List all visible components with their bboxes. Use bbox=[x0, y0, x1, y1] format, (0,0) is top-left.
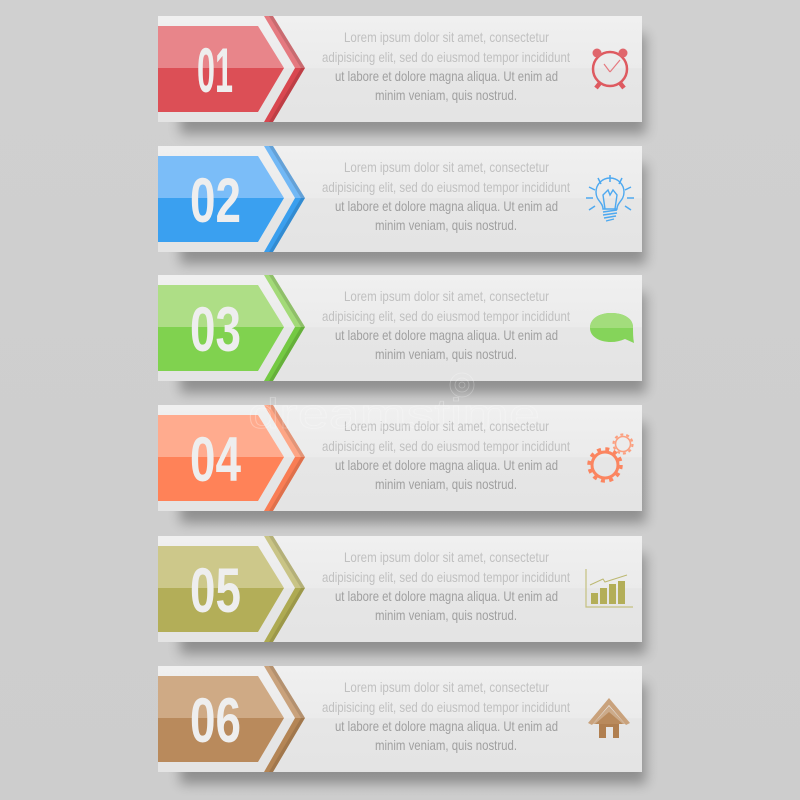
step number: 04 bbox=[190, 425, 241, 495]
panel shadow bbox=[180, 34, 646, 134]
arrow badge bbox=[158, 546, 284, 632]
text block: adipisicing elit, sed do eiusmod tempor incididunt bbox=[322, 49, 570, 65]
text block bbox=[322, 29, 570, 103]
panel 5: olive step bbox=[158, 536, 646, 654]
step number: 02 bbox=[190, 166, 241, 236]
step number: 03 bbox=[190, 295, 241, 365]
arrow badge bbox=[158, 26, 284, 112]
watermark: dreamstime bbox=[248, 390, 540, 437]
text block: minim veniam, quis nostrud. bbox=[375, 87, 517, 103]
panel shadow bbox=[180, 554, 646, 654]
text block: Lorem ipsum dolor sit amet, consectetur bbox=[344, 679, 549, 695]
text block bbox=[322, 288, 570, 362]
watermark bbox=[248, 373, 540, 437]
text block: adipisicing elit, sed do eiusmod tempor incididunt bbox=[322, 569, 570, 585]
card bbox=[158, 275, 642, 381]
text block: Lorem ipsum dolor sit amet, consectetur bbox=[344, 29, 549, 45]
chevron bbox=[264, 666, 305, 772]
text block: Lorem ipsum dolor sit amet, consectetur bbox=[344, 549, 549, 565]
step number: 05 bbox=[190, 556, 241, 626]
text block: adipisicing elit, sed do eiusmod tempor incididunt bbox=[322, 308, 570, 324]
panel shadow bbox=[180, 164, 646, 264]
card bbox=[158, 536, 642, 642]
text block: ut labore et dolore magna aliqua. Ut enim ad bbox=[335, 457, 558, 473]
text block bbox=[322, 549, 570, 623]
text block: minim veniam, quis nostrud. bbox=[375, 607, 517, 623]
icon: house bbox=[588, 698, 630, 738]
icon: speech bubble bbox=[590, 313, 634, 343]
card bbox=[158, 666, 642, 772]
panel 6: tan step bbox=[158, 666, 646, 784]
panel shadow bbox=[180, 423, 646, 523]
text block: ut labore et dolore magna aliqua. Ut enim ad bbox=[335, 198, 558, 214]
text block: minim veniam, quis nostrud. bbox=[375, 476, 517, 492]
text block: Lorem ipsum dolor sit amet, consectetur bbox=[344, 159, 549, 175]
text block: ut labore et dolore magna aliqua. Ut enim ad bbox=[335, 68, 558, 84]
panel 3: green step bbox=[158, 275, 646, 393]
icon: light bulb bbox=[586, 175, 634, 221]
panel 1: red step bbox=[158, 16, 646, 134]
text block: adipisicing elit, sed do eiusmod tempor incididunt bbox=[322, 699, 570, 715]
card bbox=[158, 405, 642, 511]
panel 2: blue step bbox=[158, 146, 646, 264]
text block: Lorem ipsum dolor sit amet, consectetur bbox=[344, 288, 549, 304]
text block bbox=[322, 679, 570, 753]
card bbox=[158, 146, 642, 252]
chevron bbox=[264, 16, 305, 122]
icon: gears bbox=[589, 434, 632, 481]
chevron bbox=[264, 405, 305, 511]
arrow badge bbox=[158, 156, 284, 242]
panel 4: orange step bbox=[158, 405, 646, 523]
text block: ut labore et dolore magna aliqua. Ut enim ad bbox=[335, 588, 558, 604]
text block: ut labore et dolore magna aliqua. Ut enim ad bbox=[335, 327, 558, 343]
text block: minim veniam, quis nostrud. bbox=[375, 346, 517, 362]
panel shadow bbox=[180, 684, 646, 784]
step number: 06 bbox=[190, 686, 241, 756]
text block: adipisicing elit, sed do eiusmod tempor incididunt bbox=[322, 438, 570, 454]
chevron bbox=[264, 146, 305, 252]
chevron bbox=[264, 536, 305, 642]
panel shadow bbox=[180, 293, 646, 393]
icon: alarm clock bbox=[592, 48, 628, 88]
icon: bar chart bbox=[586, 569, 633, 607]
arrow badge bbox=[158, 676, 284, 762]
text block: ut labore et dolore magna aliqua. Ut enim ad bbox=[335, 718, 558, 734]
text block bbox=[322, 418, 570, 492]
text block bbox=[322, 159, 570, 233]
text block: Lorem ipsum dolor sit amet, consectetur bbox=[344, 418, 549, 434]
text block: minim veniam, quis nostrud. bbox=[375, 217, 517, 233]
card bbox=[158, 16, 642, 122]
chevron bbox=[264, 275, 305, 381]
arrow badge bbox=[158, 285, 284, 371]
step number: 01 bbox=[197, 36, 233, 106]
text block: adipisicing elit, sed do eiusmod tempor incididunt bbox=[322, 179, 570, 195]
text block: minim veniam, quis nostrud. bbox=[375, 737, 517, 753]
arrow badge bbox=[158, 415, 284, 501]
